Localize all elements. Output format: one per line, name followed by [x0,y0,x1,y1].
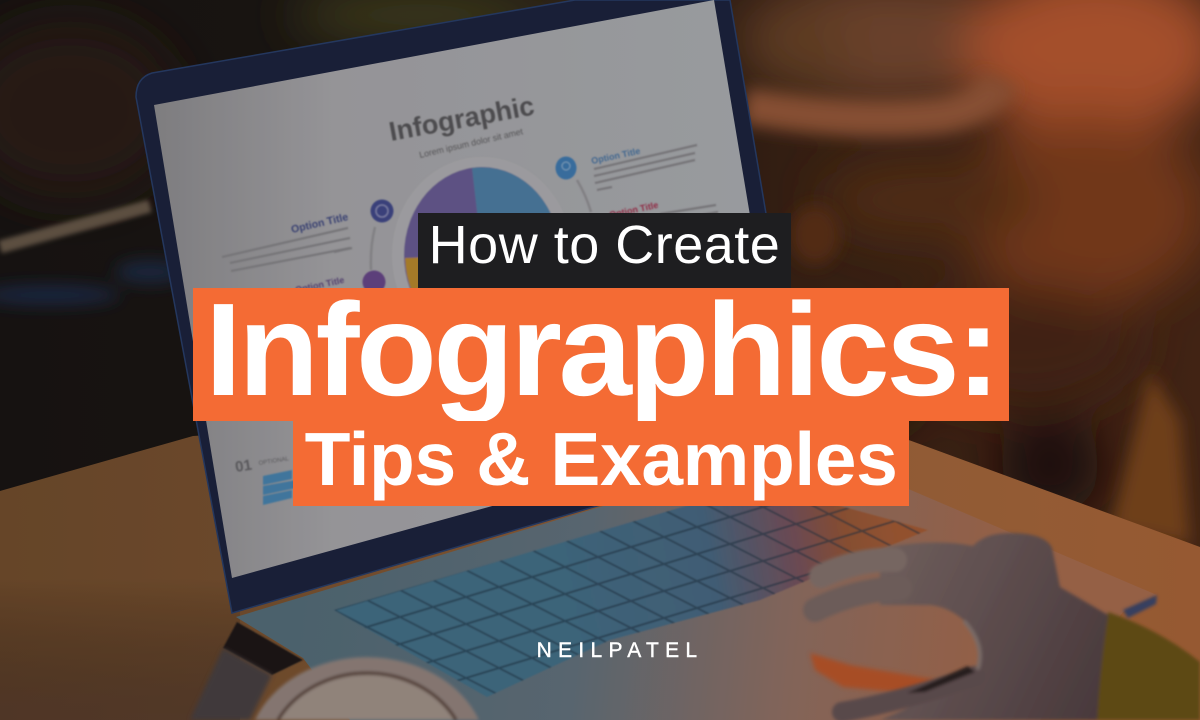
body text lines [222,145,718,271]
thumb [842,676,975,712]
icon: option two [556,156,576,180]
connector arcs [371,180,591,270]
trackpad reflection [810,653,937,693]
sweater sleeve [1095,612,1200,720]
shadow wedge under laptop [223,622,303,675]
blurred cafe lights on the right [0,0,1200,515]
ledge stripe on the left [0,206,150,247]
pie chart [392,157,572,353]
heading band: Tips and Examples: Tips & Examples [305,417,897,501]
upper finger [821,560,895,576]
hand highlight [965,622,980,668]
blurred shelf and glow shapes [0,80,1190,545]
step label: OPTIONAL [258,456,290,467]
hand on trackpad [815,533,1200,720]
thumb shadow [907,666,975,693]
laptop base [236,445,1157,720]
touch bar strip [357,510,690,612]
icon: option three [362,270,386,294]
brand logo: NEILPATEL: NEILPATEL [537,639,703,662]
slide subtitle: Lorem ipsum dolor sit amet [418,126,524,160]
heading band: Infographics: Infographics: [205,276,997,423]
option title red: Option Title [608,200,659,220]
heading band: How to Create: How to Create [429,215,780,275]
slide title: Infographic [387,91,537,147]
option title lower: Option Title [294,275,345,295]
option title left: Option Title [290,211,349,236]
cup side shade [190,648,272,720]
screen content: infographic slide [222,91,718,505]
icon: option one [370,200,394,222]
step blocks [263,470,296,505]
lower finger [815,588,900,610]
laptop lid [136,0,805,613]
hand shape [880,533,1108,720]
laptop corner strip [1123,595,1157,618]
wooden table [0,400,1200,720]
laptop screen [154,0,785,578]
step number: 01 [234,457,253,476]
option title right: Option Title [590,146,641,166]
coffee cup [255,657,479,720]
keyboard [334,484,928,697]
